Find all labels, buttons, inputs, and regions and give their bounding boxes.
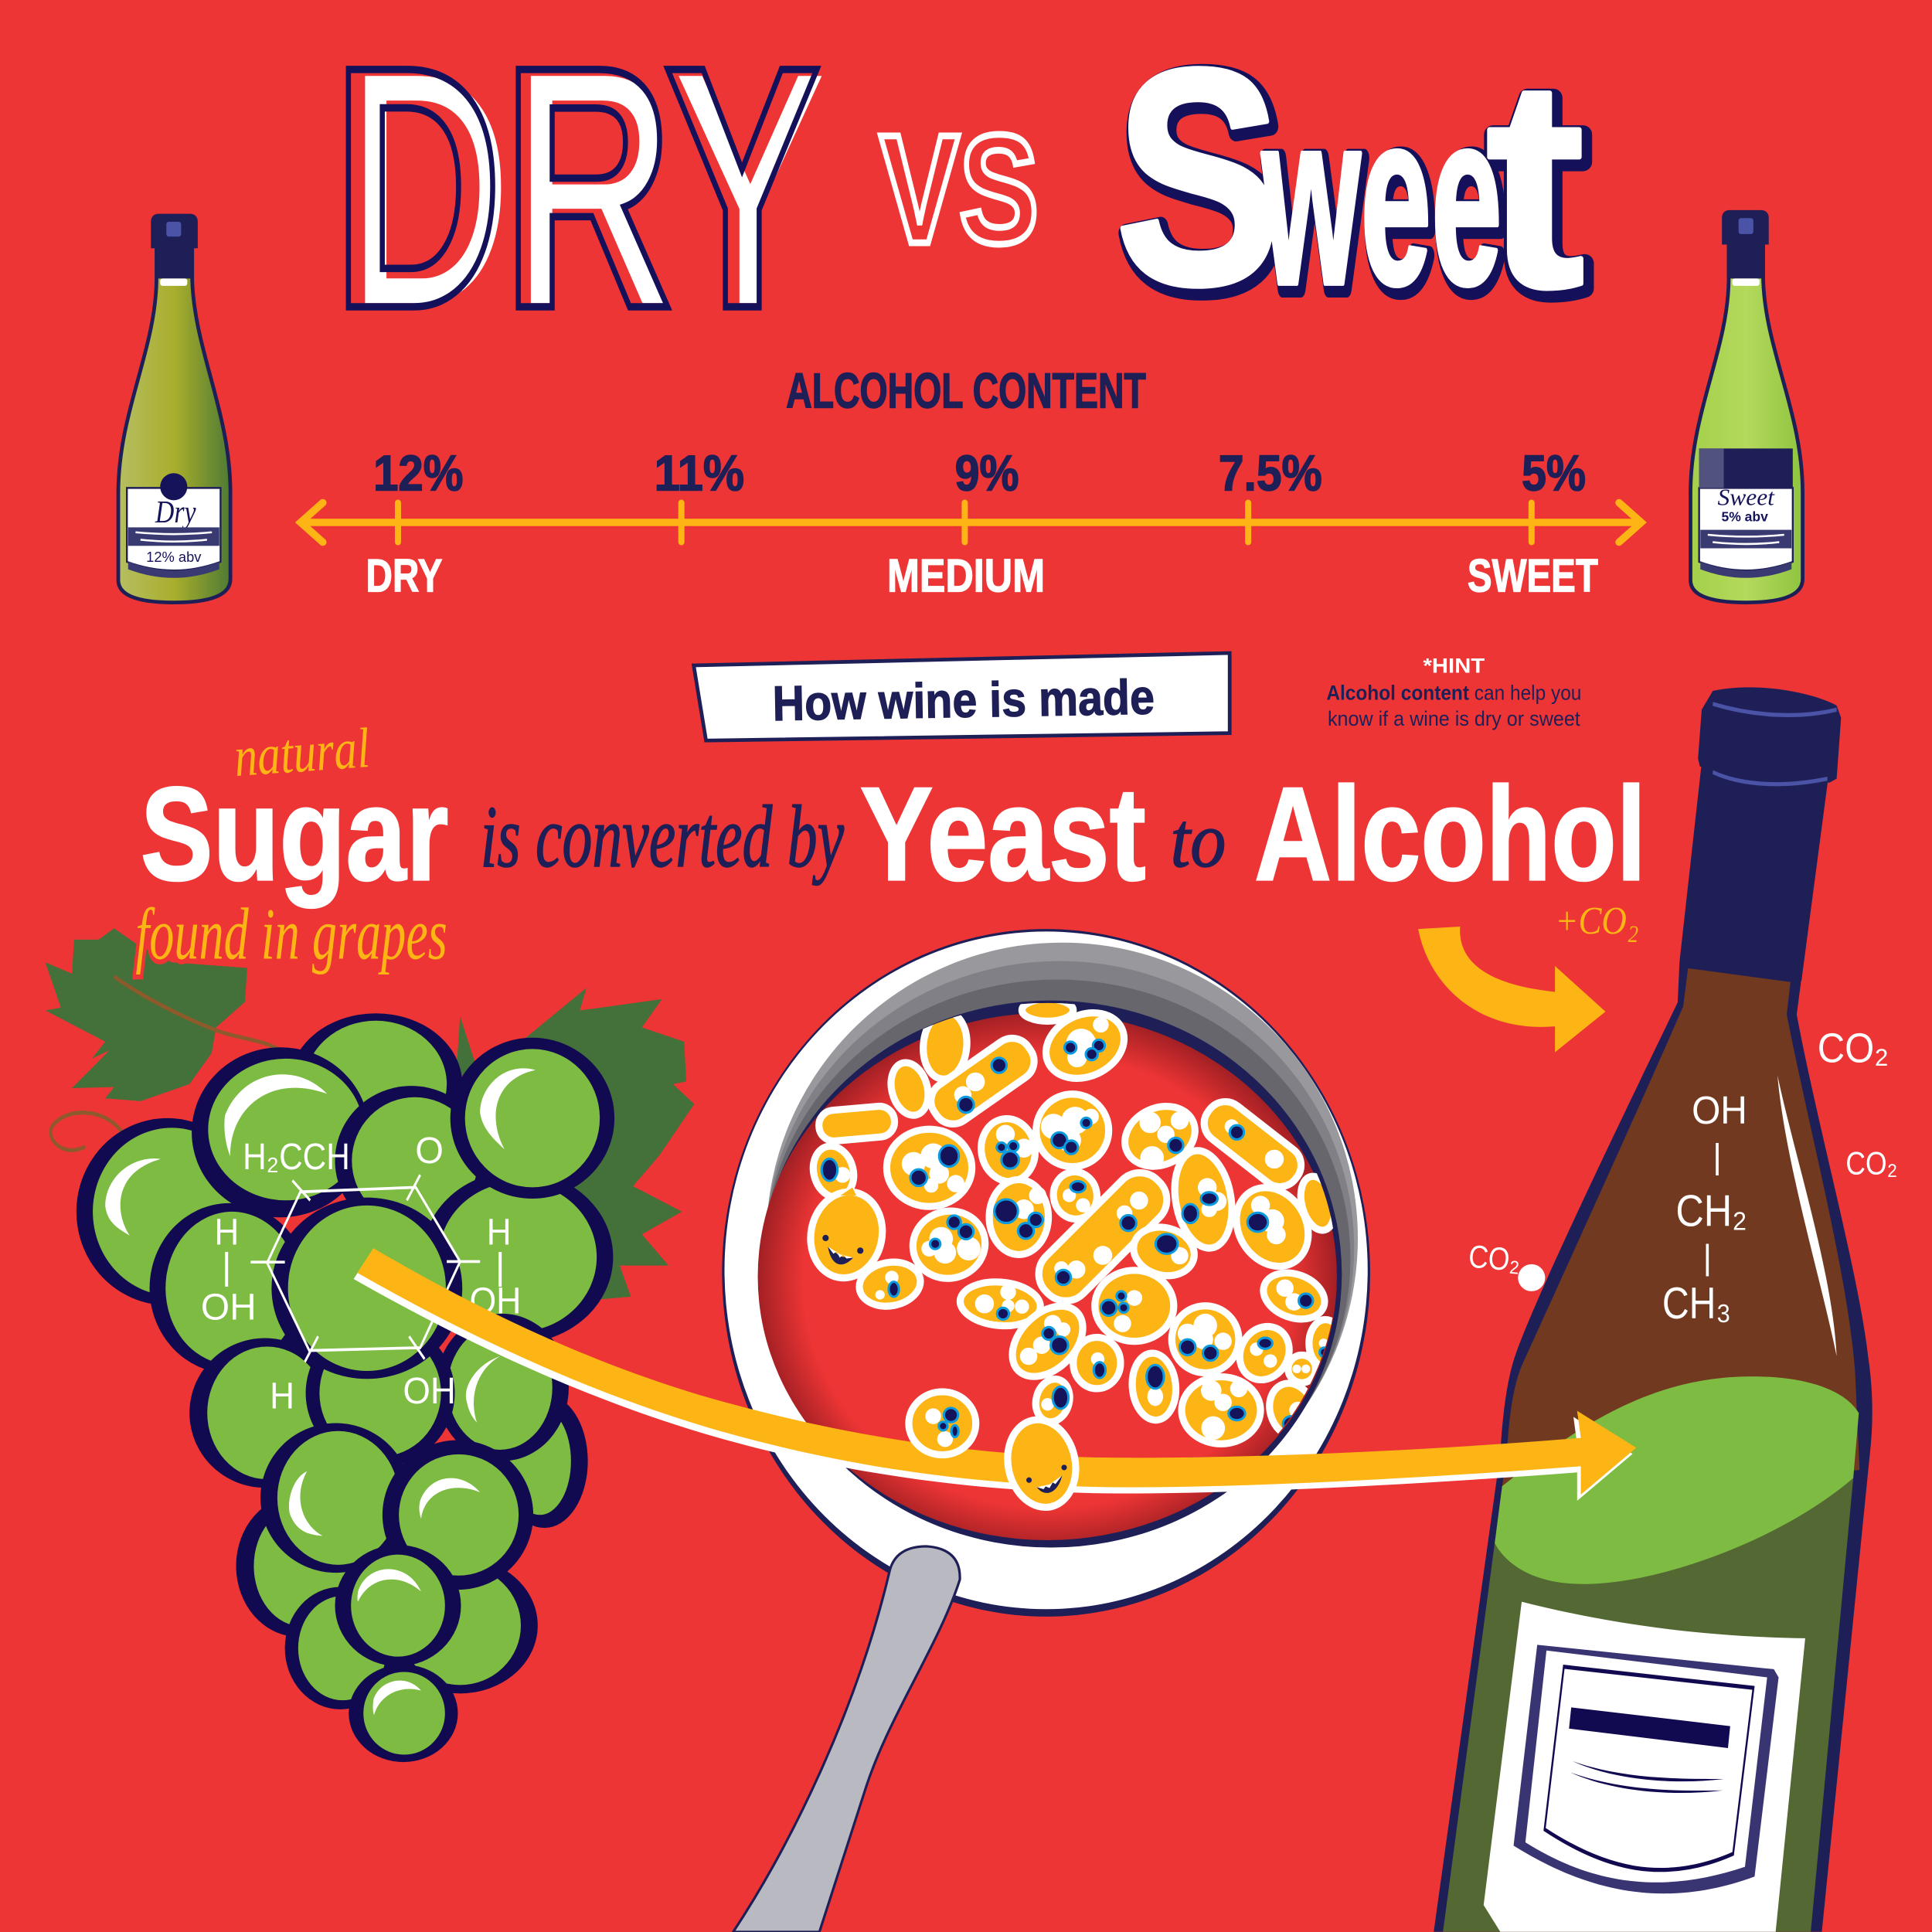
bottle glass outline [1434,961,1872,1932]
banner: how wine is made [694,653,1230,740]
stem and tendril [51,977,281,1150]
pan handle [733,1546,960,1932]
wine: dark green lower [1443,1478,1853,1932]
yeast on arrow [909,1376,1083,1514]
arrow: curved [1418,927,1605,1053]
CO2 bubbles: CO₂ [1467,1238,1522,1278]
label: dry: 12% abv [146,549,202,565]
hint note [1326,654,1581,730]
glucose formula labels: O [415,1131,444,1172]
heading: Sugar is converted by Yeast to Alcohol: is converted by [481,787,844,886]
glucose formula labels: H₂CCH [243,1137,350,1178]
title: Sweet [1115,5,1588,354]
title: Sweet: t [1490,24,1588,354]
heading: natural: natural [232,716,372,788]
percent labels: 12% [373,445,463,502]
glucose formula labels: | [495,1247,505,1287]
title: vs: VS [879,102,1039,276]
label: sweet: 5% abv [1721,509,1768,524]
CO2 bubbles [1467,1025,1897,1291]
title: Sweet: S [1119,10,1285,354]
wine surface [1495,1376,1859,1584]
leaf: left [46,928,247,1101]
ethanol formula: CH₃ [1662,1279,1731,1328]
liquid [758,1013,1337,1540]
sweetness labels: SWEET [1468,549,1598,601]
title: DRY: DRY [346,4,827,373]
yeast with smile: budding [1000,1376,1083,1514]
leaves and grapes [46,928,694,1762]
glucose formula labels: OH [469,1281,521,1322]
glucose formula labels: H [270,1376,294,1417]
bottle neck [1679,763,1829,981]
hint note: Alcohol content can help you [1326,681,1581,705]
small bottle: sweet [1690,212,1803,603]
glucose formula labels: H [487,1212,512,1253]
hint note: know if a wine is dry or sweet [1328,706,1580,730]
CO2 bubbles: CO₂ [1818,1025,1889,1071]
big wine bottle [1434,687,1872,1932]
heading: Sugar is converted by Yeast to Alcohol [141,760,1646,908]
scale line with arrowheads [301,503,1641,543]
pan wall [760,943,1358,1548]
hint note: *HINT [1423,654,1485,678]
yeast with smile: left [807,1187,886,1281]
small bottle: dry [118,216,230,603]
sweetness labels [366,549,1598,601]
glass highlight [1777,1076,1837,1356]
ethanol formula: | [1702,1239,1712,1277]
grape cluster [46,928,694,1762]
title: DRY [332,0,827,380]
percent labels: 5% [1522,445,1586,502]
glucose ring [250,1175,480,1362]
heading: alcohol content: ALCOHOL CONTENT [786,363,1146,419]
glucose formula labels: OH [201,1287,257,1328]
wine: brown upper [1500,968,1859,1502]
sweetness labels: DRY [366,549,442,601]
pan rim [722,929,1370,1617]
label: sweet: Sweet [1718,485,1776,511]
title: Sweet: wee [1264,65,1505,341]
title: Sweet: wee [1260,60,1502,336]
alcohol scale [301,445,1641,601]
grapes [289,1013,462,1155]
percent labels [373,445,1586,502]
ethanol formula: OH [1692,1088,1747,1132]
bottle cap [1698,687,1841,784]
title: DRY: DRY [332,0,821,380]
heading: found in grapes: found in grapes [135,893,447,975]
bottle label [1484,1602,1805,1932]
sweetness labels: MEDIUM [887,549,1045,601]
arrow: sugar through yeast to alcohol [354,1248,1636,1501]
heading: Sugar is converted by Yeast to Alcohol: Yeast [860,760,1146,908]
glucose formula labels: H [214,1212,239,1253]
percent labels: 9% [955,445,1019,502]
heading: Sugar is converted by Yeast to Alcohol: Sugar [141,760,448,908]
label: dry [127,473,220,578]
ethanol formula [1662,1088,1747,1328]
heading: Sugar is converted by Yeast to Alcohol: Alcohol [1254,760,1646,908]
round yeast [909,1392,976,1455]
label: dry: Dry [155,494,196,529]
glucose formula labels: OH [403,1371,456,1412]
ethanol formula: CH₂ [1675,1186,1747,1236]
pan with yeast [722,929,1370,1617]
banner: how wine is made: How wine is made [772,669,1155,731]
title: Sweet: S [1115,5,1281,349]
heading: Sugar is converted by Yeast to Alcohol: to [1171,797,1226,884]
glucose formula labels [201,1131,521,1417]
percent labels: 7.5% [1219,445,1322,502]
heading: plus CO2: +CO₂ [1555,900,1639,944]
yeast cells [803,999,1342,1444]
glucose formula labels: | [222,1247,231,1287]
percent labels: 11% [655,445,744,502]
label: sweet [1699,448,1793,578]
CO2 bubbles: CO₂ [1845,1145,1897,1181]
ethanol formula: | [1713,1138,1722,1175]
title: Sweet: t [1486,19,1584,349]
leaf: right [456,988,694,1300]
